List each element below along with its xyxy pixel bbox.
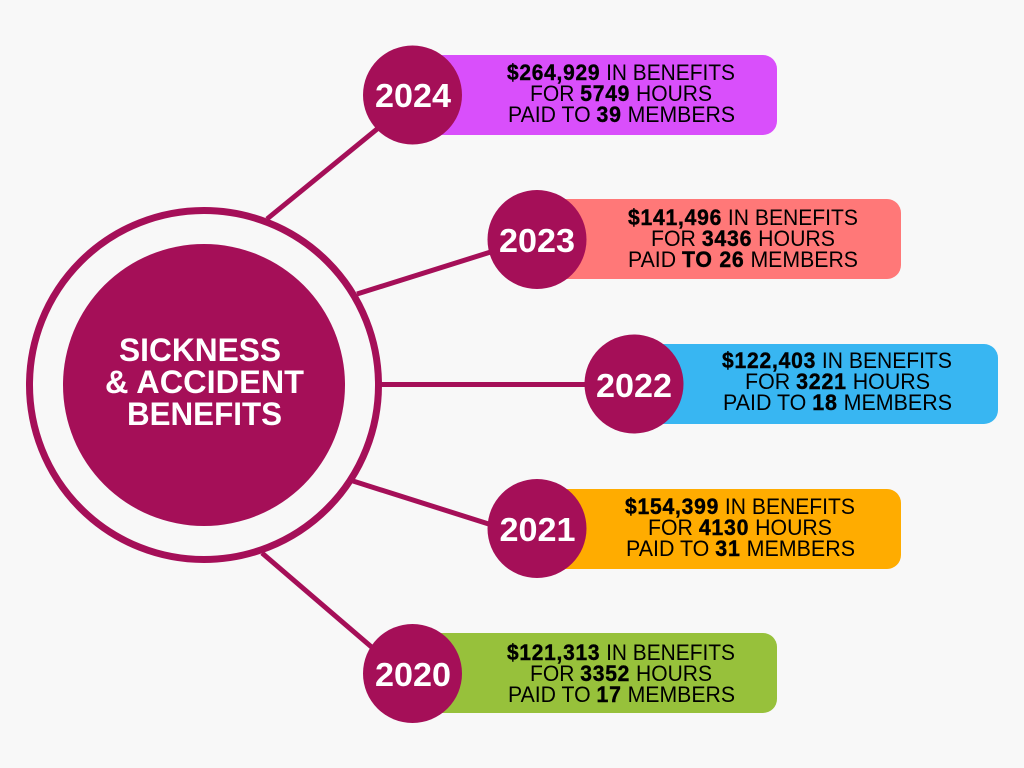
text: 2022 stats	[722, 348, 952, 415]
text: 2024 stats: PAID TO 39 MEMBERS	[508, 102, 735, 127]
connector: center to 2022	[380, 382, 592, 387]
entry: 2020	[363, 624, 777, 723]
text: 2022 stats: PAID TO 18 MEMBERS	[723, 390, 952, 415]
entry: 2024	[363, 46, 777, 144]
text: 2023 stats: $141,496 IN BENEFITS	[628, 205, 858, 230]
panel: 2023 bar	[545, 199, 901, 279]
title	[105, 332, 304, 432]
year: 2020: 2020	[375, 656, 451, 693]
text: 2023 stats: FOR 3436 HOURS	[651, 226, 835, 251]
text: 2022 stats: FOR 3221 HOURS	[745, 369, 930, 394]
connector: center to 2020	[262, 553, 375, 650]
entry: 2022	[584, 334, 998, 434]
panel: 2022 bar	[642, 344, 998, 424]
entry: 2021	[488, 479, 901, 578]
connector: center to 2024	[267, 125, 382, 219]
year: 2024: 2024	[375, 77, 452, 114]
title: & ACCIDENT	[105, 364, 304, 400]
text: 2020 stats: PAID TO 17 MEMBERS	[508, 682, 735, 707]
text: 2021 stats: FOR 4130 HOURS	[648, 515, 832, 540]
text: 2024 stats: FOR 5749 HOURS	[530, 81, 712, 106]
year: 2022: 2022	[596, 367, 672, 404]
text: 2022 stats: $122,403 IN BENEFITS	[722, 348, 952, 373]
year: 2021: 2021	[500, 511, 576, 548]
central hub	[30, 210, 378, 560]
outer ring	[30, 210, 378, 560]
connector: center to 2021	[353, 481, 495, 526]
text: 2020 stats	[507, 640, 735, 707]
title: SICKNESS	[119, 332, 281, 368]
connector: center to 2023	[357, 250, 497, 294]
icon: 2021 circle	[488, 479, 586, 578]
text: 2023 stats	[628, 205, 858, 272]
text: 2024 stats	[507, 60, 735, 127]
text: 2021 stats: PAID TO 31 MEMBERS	[626, 536, 855, 561]
text: 2021 stats: $154,399 IN BENEFITS	[625, 494, 855, 519]
panel: 2021 bar	[545, 489, 901, 569]
icon: 2024 circle	[363, 46, 462, 144]
entry: 2023	[488, 190, 901, 289]
panel: 2024 bar	[420, 55, 777, 135]
panel: 2020 bar	[420, 633, 777, 713]
text: 2021 stats	[625, 494, 855, 561]
text: 2024 stats: $264,929 IN BENEFITS	[507, 60, 735, 85]
icon: 2023 circle	[488, 190, 586, 289]
text: 2020 stats: $121,313 IN BENEFITS	[507, 640, 735, 665]
inner circle	[63, 244, 345, 526]
year: 2023: 2023	[499, 222, 575, 259]
icon: 2020 circle	[363, 624, 462, 723]
title: BENEFITS	[127, 396, 282, 432]
text: 2023 stats: PAID TO 26 MEMBERS	[628, 247, 858, 272]
icon: 2022 circle	[584, 334, 684, 434]
text: 2020 stats: FOR 3352 HOURS	[530, 661, 712, 686]
